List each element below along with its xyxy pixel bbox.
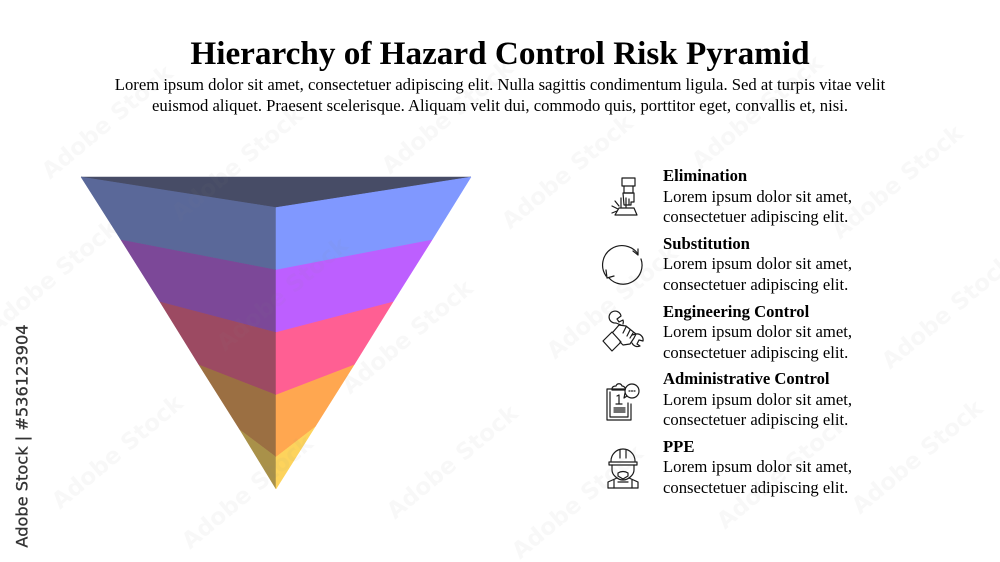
watermark pattern: Adobe Stock <box>847 395 989 520</box>
watermark pattern: Adobe Stock <box>507 440 649 562</box>
text: elimination <box>663 166 852 226</box>
text: engineering control <box>663 302 852 362</box>
watermark pattern: Adobe Stock <box>827 120 969 245</box>
text: elimination: Elimination <box>663 166 747 185</box>
title: Hierarchy of Hazard Control Risk Pyramid <box>190 35 810 72</box>
text: administrative control: consectetuer adipiscing elit. <box>663 410 848 429</box>
text: substitution <box>663 234 852 294</box>
level 1 elimination <box>81 177 471 270</box>
intro text: Lorem ipsum dolor sit amet, consectetuer adipiscing elit. Nulla sagittis condimentum ligula. Sed at turpis vitae velit <box>115 74 885 94</box>
text: substitution: Substitution <box>663 234 750 252</box>
watermark pattern: Adobe Stock <box>47 390 189 515</box>
intro text <box>115 74 886 114</box>
level 4 administrative control <box>199 365 354 457</box>
text: elimination: consectetuer adipiscing elit. <box>663 207 848 226</box>
text: administrative control <box>663 369 852 429</box>
icon: clipboard with speech bubble <box>606 383 640 421</box>
icon: worker with helmet <box>607 448 639 489</box>
text: administrative control: Administrative Control <box>663 369 830 388</box>
watermark pattern: Adobe Stock <box>212 232 354 357</box>
intro text: euismod aliquet. Praesent scelerisque. Aliquam velit dui, commodo quis, porttitor eget, convallis et, nisi. <box>152 96 848 114</box>
watermark pattern: Adobe Stock <box>167 102 309 227</box>
watermark pattern: Adobe Stock <box>542 240 684 365</box>
watermark pattern: Adobe Stock <box>687 50 829 175</box>
watermark pattern: Adobe Stock <box>712 410 854 535</box>
text: ppe: consectetuer adipiscing elit. <box>663 478 848 496</box>
stock id label: Adobe Stock | #536123904 <box>12 324 32 548</box>
icon: hand holding wrench <box>602 310 644 352</box>
level 3 engineering control <box>160 302 393 395</box>
text: ppe: PPE <box>663 436 694 456</box>
text: elimination: Lorem ipsum dolor sit amet, <box>663 186 852 206</box>
text: substitution: consectetuer adipiscing elit. <box>663 274 848 294</box>
text: engineering control: Lorem ipsum dolor sit amet, <box>663 322 852 341</box>
watermark pattern: Adobe Stock <box>377 55 519 180</box>
text: ppe <box>663 436 852 496</box>
watermark pattern: Adobe Stock <box>337 275 479 400</box>
pyramid top face <box>81 177 471 208</box>
level 5 ppe <box>240 427 315 489</box>
text: ppe: Lorem ipsum dolor sit amet, <box>663 457 852 476</box>
text: substitution: Lorem ipsum dolor sit amet, <box>663 254 852 273</box>
watermark pattern: Adobe Stock <box>177 430 319 555</box>
level 2 substitution <box>121 240 432 332</box>
text: administrative control: Lorem ipsum dolor sit amet, <box>663 390 852 408</box>
watermark pattern: Adobe Stock <box>382 400 524 525</box>
text: engineering control: consectetuer adipiscing elit. <box>663 342 848 362</box>
text: engineering control: Engineering Control <box>663 302 809 320</box>
watermark pattern: Adobe Stock <box>497 110 639 235</box>
watermark pattern: Adobe Stock <box>37 60 179 185</box>
icon: circular arrows <box>602 245 643 285</box>
icon: elimination hand pressing button <box>611 177 638 216</box>
